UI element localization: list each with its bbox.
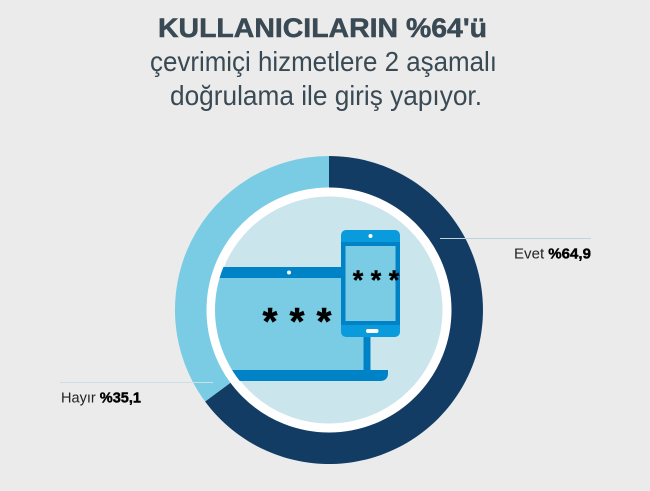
laptop password asterisks: * <box>290 301 305 343</box>
phone password asterisks <box>353 265 400 295</box>
phone password asterisks: * <box>353 265 364 295</box>
donut chart <box>175 156 483 464</box>
phone body <box>341 230 400 337</box>
phone camera <box>368 234 372 238</box>
icon: laptop <box>205 267 388 381</box>
laptop top bar <box>220 267 341 278</box>
laptop password asterisks: * <box>317 301 332 343</box>
laptop screen <box>205 278 364 370</box>
label: Hayır: Hayır %35,1 <box>61 390 141 406</box>
phone inner band <box>341 242 400 325</box>
phone screen <box>346 246 396 321</box>
title: doğrulama ile giriş yapıyor. <box>170 80 482 111</box>
white ring and centre disc <box>211 192 447 428</box>
laptop password asterisks: * <box>263 301 278 343</box>
title: KULLANICILARIN %64'ü <box>158 13 487 43</box>
laptop base <box>232 370 388 381</box>
phone button <box>366 329 378 333</box>
laptop camera dot <box>287 270 291 274</box>
donut segment: Hayır 35.1% <box>175 156 329 402</box>
infographic canvas <box>60 18 591 464</box>
title <box>150 13 497 111</box>
label: Evet: Evet %64,9 <box>514 246 591 262</box>
leader line: Hayır <box>60 382 213 383</box>
laptop password asterisks <box>263 301 332 343</box>
title: çevrimiçi hizmetlere 2 aşamalı <box>150 46 497 77</box>
phone password asterisks: * <box>389 265 400 295</box>
donut segment: Evet 64.9% <box>205 156 483 464</box>
phone password asterisks: * <box>371 265 382 295</box>
leader line: Evet <box>440 238 591 239</box>
icon: phone <box>341 230 400 337</box>
laptop stand <box>364 335 370 371</box>
